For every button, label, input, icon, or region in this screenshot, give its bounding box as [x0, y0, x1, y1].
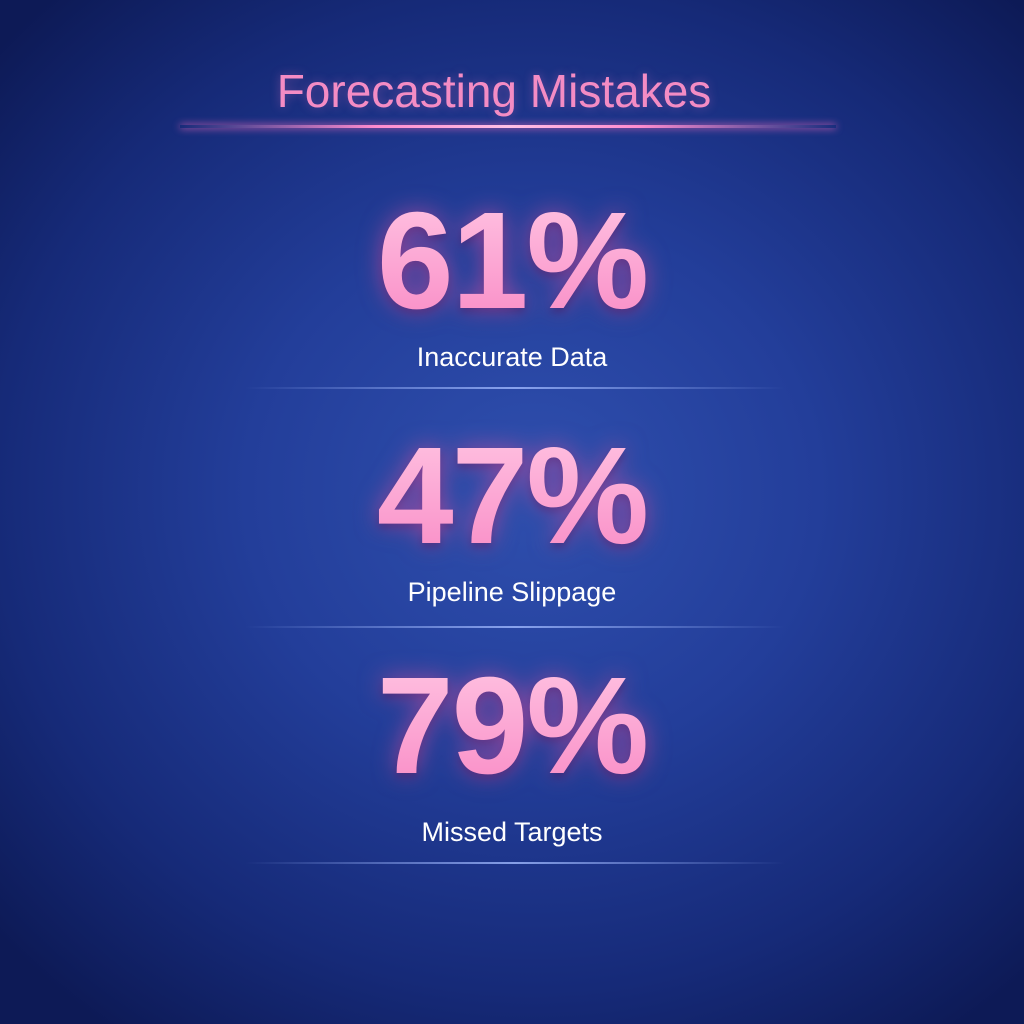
number 79% [0, 657, 1024, 795]
label: Pipeline Slippage: Pipeline Slippage [408, 577, 616, 607]
number 47% [0, 427, 1024, 565]
label: Inaccurate Data: Inaccurate Data [417, 342, 607, 372]
stat: 47% [366, 419, 660, 607]
number 61%: 61% [377, 184, 647, 338]
title: Forecasting Mistakes [277, 65, 711, 117]
number 61% [0, 192, 1024, 330]
stat: 79% [371, 649, 660, 847]
number 47%: 47% [377, 419, 647, 573]
stat: 61% [366, 184, 660, 372]
number 79%: 79% [377, 649, 647, 803]
label: Missed Targets: Missed Targets [421, 817, 603, 847]
